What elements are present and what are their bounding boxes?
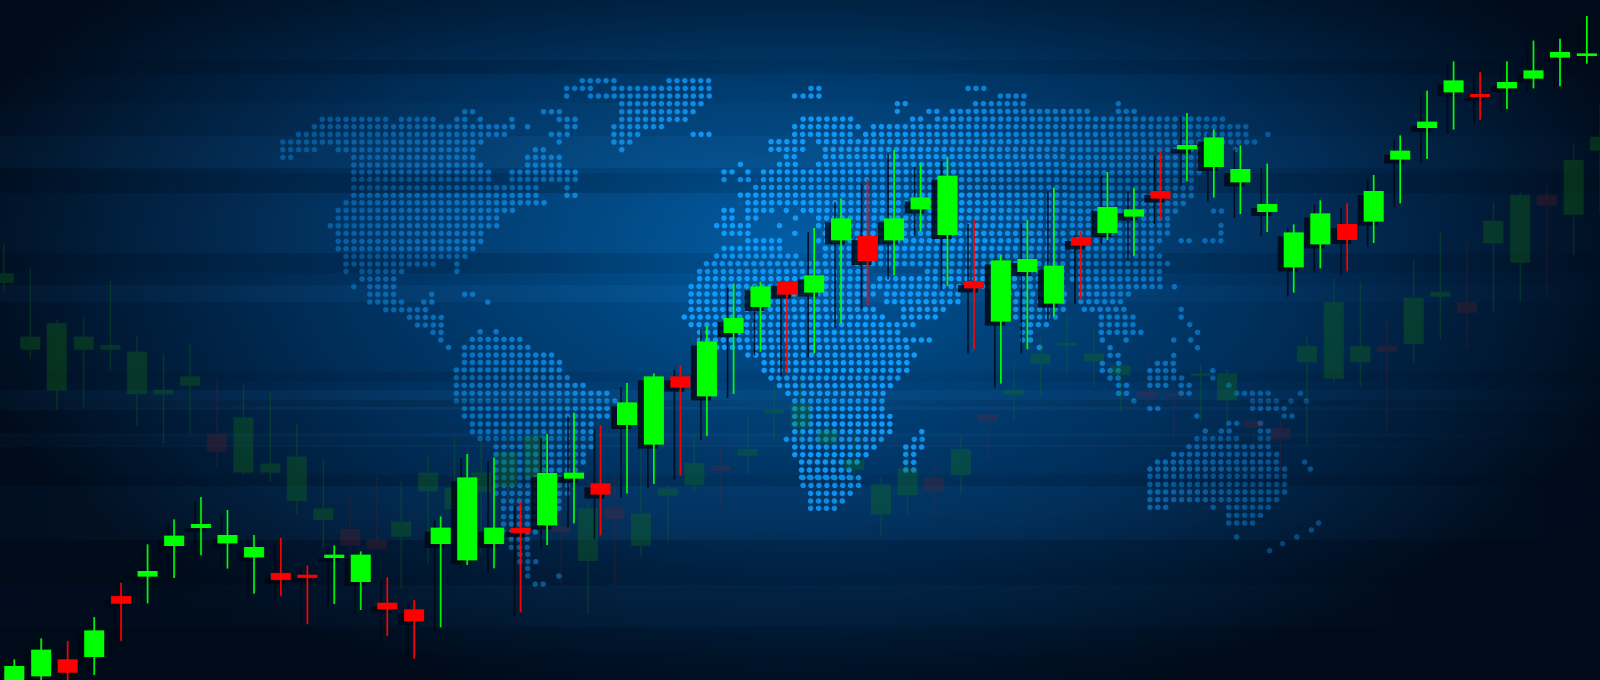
faded background candles: red: [217, 184, 1547, 585]
map: europe, africa and central asia: [684, 142, 1067, 477]
map: south america and lower africa tip: [448, 332, 922, 584]
main red candlesticks: [68, 72, 1480, 680]
horizontal light streaks: [0, 103, 1600, 627]
map: southeast asia and australia: [1039, 340, 1319, 551]
dotted world map: [283, 81, 1319, 584]
map: northern and eastern asia: [795, 88, 1268, 332]
faded background candles: green: [4, 103, 1600, 614]
map: north america and greenland: [283, 81, 709, 340]
